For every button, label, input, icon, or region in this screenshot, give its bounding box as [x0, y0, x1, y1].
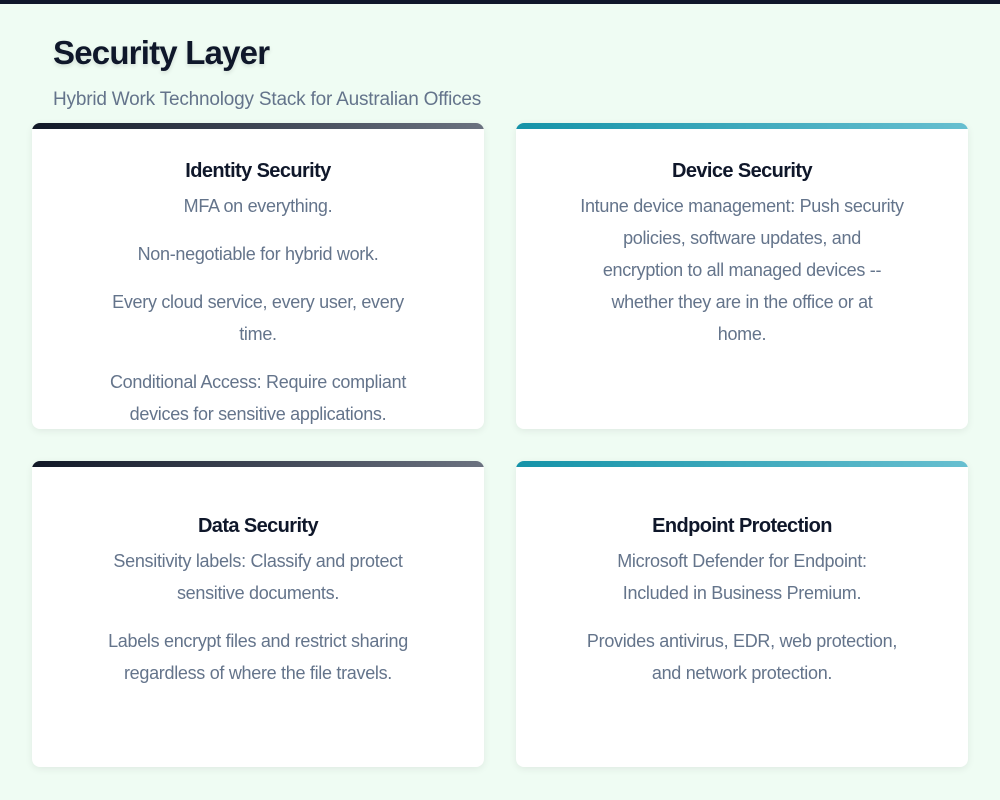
text: identity security body: time. [239, 324, 277, 344]
text: endpoint protection body: and network protection. [652, 663, 832, 683]
text: data security body: regardless of where the file travels. [124, 663, 392, 683]
panel: identity security [32, 123, 484, 429]
text: identity security body: Non-negotiable for hybrid work. [138, 244, 378, 264]
title: Security Layer [53, 34, 269, 71]
heading: data security: Data Security [198, 515, 318, 537]
text: device security body: whether they are in the office or at [611, 292, 873, 312]
text: endpoint protection body: Microsoft Defender for Endpoint: [617, 551, 867, 571]
panel: endpoint protection [516, 461, 968, 767]
heading: device security: Device Security [672, 160, 812, 182]
panel: device security [516, 123, 968, 429]
text: endpoint protection body: Provides antivirus, EDR, web protection, [587, 631, 897, 651]
text: device security body: home. [718, 324, 766, 344]
heading: identity security: Identity Security [185, 160, 331, 182]
text: identity security body: Every cloud service, every user, every [112, 292, 404, 312]
text: endpoint protection body: Included in Business Premium. [623, 583, 861, 603]
text: identity security body: MFA on everything. [184, 196, 332, 216]
panel: data security [32, 461, 484, 767]
text: identity security body: devices for sensitive applications. [130, 404, 386, 424]
text: data security body [108, 551, 408, 683]
text: device security body: encryption to all managed devices -- [603, 260, 881, 280]
text: endpoint protection body [587, 551, 897, 683]
text: identity security body: Conditional Access: Require compliant [110, 372, 406, 392]
text: device security body [580, 196, 904, 344]
text: data security body: sensitive documents. [177, 583, 339, 603]
text: device security body: Intune device management: Push security [580, 196, 904, 216]
text: data security body: Labels encrypt files and restrict sharing [108, 631, 408, 651]
text: device security body: policies, software updates, and [623, 228, 861, 248]
text: data security body: Sensitivity labels: Classify and protect [113, 551, 403, 571]
subtitle: Hybrid Work Technology Stack for Australian Offices [53, 89, 481, 110]
heading: endpoint protection: Endpoint Protection [652, 515, 832, 537]
text: identity security body [110, 196, 406, 424]
